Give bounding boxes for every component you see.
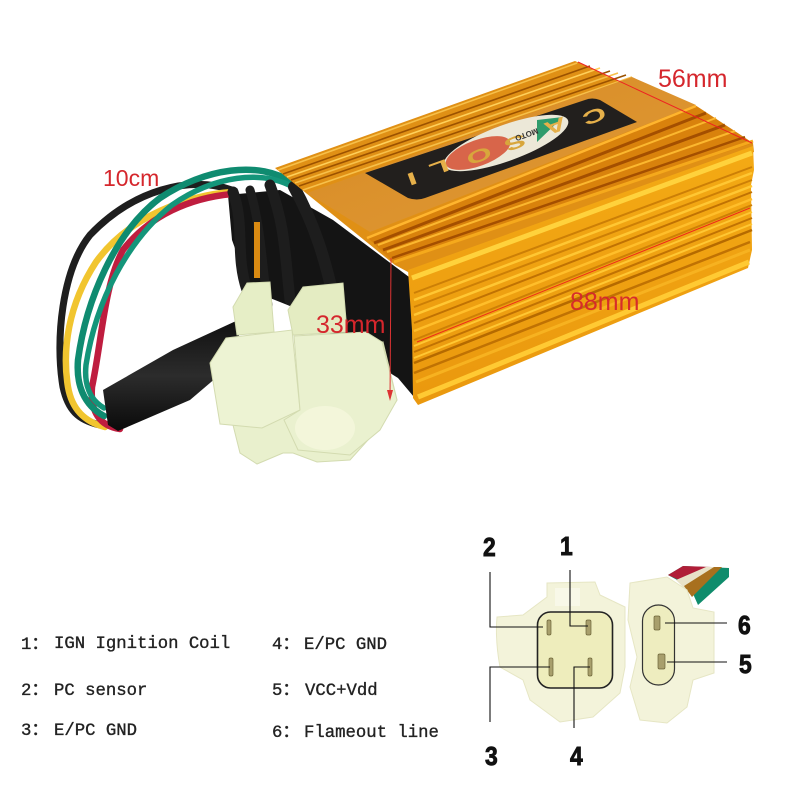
legend row 4: E/PC GND	[304, 636, 387, 655]
legend row 6: 6：	[272, 724, 300, 743]
emblem letters: A	[541, 112, 569, 139]
legend row 5: 5：	[272, 682, 300, 701]
wire harness	[60, 170, 293, 429]
white plastic connector	[210, 282, 397, 464]
connector rear tab right	[288, 283, 347, 335]
plug 4-pin body	[496, 582, 625, 722]
legend row 2: 2：	[21, 682, 49, 701]
gold strip behind tubes	[254, 222, 260, 278]
legend row 1: IGN Ignition Coil	[54, 635, 230, 654]
label: 88mm: 88mm	[570, 288, 639, 316]
pin number 2: 2	[483, 534, 496, 562]
yellow wire	[66, 192, 232, 427]
connector left body	[210, 330, 300, 428]
module side face	[408, 146, 754, 405]
green wire 1	[78, 170, 293, 416]
emblem small text: MOTO	[514, 126, 539, 143]
legend row 4: 4：	[272, 636, 300, 655]
heat-shrink wire tubes	[233, 185, 333, 305]
connector rear tab left	[233, 282, 274, 335]
emblem red half	[442, 129, 514, 177]
black wire	[60, 184, 232, 425]
module end opening (dark)	[228, 190, 414, 397]
plug 4-pin top tab	[555, 588, 580, 606]
front fins on top	[367, 105, 753, 262]
emblem oval	[438, 104, 574, 182]
emblem letters	[404, 102, 609, 190]
emblem letters: I	[404, 168, 420, 190]
emblem letters: S	[501, 129, 529, 156]
label: 10cm: 10cm	[103, 165, 159, 191]
legend row 1: 1：	[21, 636, 49, 655]
connector socket	[295, 406, 355, 450]
emblem letters: O	[464, 142, 495, 169]
pin number 3: 3	[485, 743, 498, 771]
leader lines	[490, 570, 727, 728]
legend row 5	[272, 682, 378, 701]
pin number 6: 6	[738, 612, 751, 640]
emblem letters: L	[426, 155, 452, 180]
dimension line: length	[417, 208, 750, 342]
2-pin socket	[642, 605, 674, 685]
legend row 2: PC sensor	[54, 682, 147, 701]
legend row 5: VCC+Vdd	[305, 682, 378, 701]
pin legend	[21, 635, 439, 743]
red wire	[92, 194, 232, 429]
4-pin socket	[538, 612, 612, 688]
connector right body	[284, 332, 397, 455]
label: 33mm: 33mm	[316, 311, 385, 339]
terminal pins	[547, 616, 665, 676]
label: 56mm: 56mm	[658, 65, 727, 93]
legend row 6: Flameout line	[304, 724, 439, 743]
emblem letters: C	[579, 102, 609, 130]
emblem black badge	[365, 98, 637, 200]
legend row 3: E/PC GND	[54, 722, 137, 741]
dimension arrow: height	[387, 258, 393, 401]
back fins on top	[278, 63, 632, 190]
legend row 3: 3：	[21, 722, 49, 741]
connector pinout diagram	[483, 533, 752, 771]
dimension line: width	[578, 62, 752, 143]
logo emblem	[365, 98, 637, 200]
pin number 4: 4	[570, 743, 583, 771]
top flat plate	[307, 77, 696, 232]
plug 2-pin body	[628, 577, 714, 723]
pin number 1: 1	[560, 533, 573, 561]
black sleeve	[103, 321, 242, 431]
connector lower shell	[233, 342, 397, 464]
green wire 2	[86, 177, 293, 408]
product photo: ignition module	[60, 61, 754, 464]
side fins	[412, 153, 752, 397]
wires out of plug	[668, 566, 729, 605]
emblem green tip	[537, 117, 563, 142]
pin number 5: 5	[739, 651, 752, 679]
module top face	[275, 61, 754, 272]
